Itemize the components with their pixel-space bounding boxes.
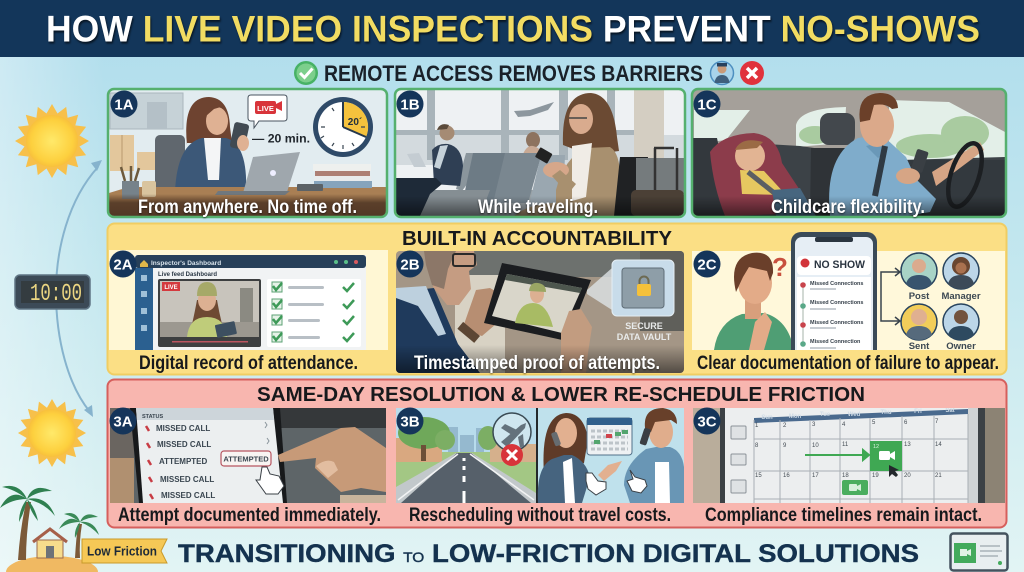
panel 3C <box>693 408 1005 526</box>
heading text: REMOTE ACCESS REMOVES BARRIERS <box>324 61 703 86</box>
icon: red cross <box>740 61 764 85</box>
title: HOW LIVE VIDEO INSPECTIONS PREVENT NO-SHOWS <box>46 8 980 50</box>
calendar: 13 <box>904 442 911 448</box>
header banner <box>0 0 1024 57</box>
sun-path timeline <box>15 104 102 467</box>
panel 2A <box>109 250 388 374</box>
woman on phone <box>538 413 622 503</box>
panel border <box>108 89 387 217</box>
panel 1A <box>108 89 387 218</box>
badge 1C: 1C <box>697 96 717 114</box>
calendar: 20 <box>904 473 911 479</box>
badge 2B <box>396 250 424 278</box>
caption: From anywhere. No time off. <box>138 197 357 218</box>
calendar: Wed <box>848 412 861 418</box>
badge 3C <box>694 408 720 434</box>
icon: inspector <box>710 62 734 84</box>
tablet list: ATTEMPTED <box>223 454 269 464</box>
badge 1A <box>110 90 138 118</box>
driver <box>829 93 984 216</box>
cursor hands <box>586 473 606 495</box>
icon: no flights <box>493 413 531 466</box>
panel 2C <box>692 232 1005 374</box>
palm left <box>0 486 55 560</box>
badge 3B: 3B <box>400 414 420 430</box>
road scene <box>396 408 538 503</box>
tablet list: ATTEMPTED <box>159 457 208 466</box>
avatars <box>901 253 979 340</box>
duration label: — 20 min. <box>252 132 310 146</box>
calendar: 11 <box>842 442 849 448</box>
avatar labels: Sent <box>909 341 930 352</box>
vault label: DATA VAULT <box>617 332 672 342</box>
steering wheel <box>946 141 984 209</box>
calendar: 10 <box>812 443 819 449</box>
checklist <box>267 279 361 347</box>
forearm and watch <box>464 288 494 336</box>
low friction banner: Low Friction <box>87 544 157 558</box>
plane <box>514 102 554 117</box>
calendar: 1 <box>755 423 759 429</box>
calendar: 2 <box>783 423 787 429</box>
stack of binders <box>297 164 372 191</box>
section heading: remote access <box>294 61 764 86</box>
calendar: 21 <box>935 473 942 479</box>
badge 3A: 3A <box>113 414 133 430</box>
avatar labels: Post <box>909 291 930 302</box>
panel 2B <box>396 250 684 374</box>
tablet list: MISSED CALL <box>161 491 215 500</box>
caption: Compliance timelines remain intact. <box>705 505 982 526</box>
badge 1C <box>694 90 720 118</box>
badge 1B: 1B <box>400 96 420 114</box>
vault label: SECURE <box>625 321 663 331</box>
icon: high sun <box>15 104 89 178</box>
low friction banner <box>82 539 167 563</box>
confused man <box>714 253 794 350</box>
calendar: Tue <box>820 412 831 418</box>
icon: green check <box>294 61 318 85</box>
badge 1A: 1A <box>114 96 134 114</box>
calendar: 18 <box>842 473 849 479</box>
caption: Attempt documented immediately. <box>118 505 381 526</box>
cursor <box>889 465 899 477</box>
calendar: 9 <box>783 443 787 449</box>
calendar: 15 <box>755 473 762 479</box>
live bubble: LIVE <box>257 104 274 113</box>
panel 1C <box>692 89 1006 218</box>
icon: device with video call <box>950 534 1008 570</box>
clock <box>313 97 373 157</box>
phone <box>791 232 877 362</box>
man with laptop <box>396 124 463 216</box>
green slot <box>870 441 902 471</box>
caption: While traveling. <box>478 197 598 218</box>
badge 2A: 2A <box>113 256 133 274</box>
calendar: 19 <box>872 473 879 479</box>
badge 3A <box>110 408 136 434</box>
calendar: Sat <box>945 408 955 414</box>
icon: low sun <box>18 399 86 467</box>
calendar: 7 <box>935 419 939 425</box>
hand <box>561 309 592 373</box>
live bubble <box>248 95 287 128</box>
calendar: Sun <box>761 415 773 421</box>
panel 3B <box>396 408 684 526</box>
tablet list: STATUS <box>142 414 164 420</box>
connector arrows <box>881 268 900 325</box>
heading: SAME-DAY RESOLUTION & LOWER RE-SCHEDULE FRICTION <box>257 383 865 406</box>
caption: Timestamped proof of attempts. <box>414 353 660 374</box>
house <box>33 529 67 558</box>
heading: BUILT-IN ACCOUNTABILITY <box>402 227 672 250</box>
call scene <box>536 408 684 503</box>
pointing hand <box>278 427 386 492</box>
video feed: LIVE <box>164 285 178 291</box>
tablet <box>484 263 591 341</box>
calendar: 6 <box>904 420 908 426</box>
phone: Missed Connections <box>810 281 863 287</box>
footer tagline: TRANSITIONING TO LOW-FRICTION DIGITAL SOLUTIONS <box>178 540 919 568</box>
panel 1B <box>395 89 685 218</box>
badge 3C: 3C <box>697 414 717 430</box>
badge 2C <box>694 250 720 278</box>
interior <box>733 144 1005 216</box>
green slot: 12 <box>873 444 879 450</box>
calendar: 17 <box>812 473 819 479</box>
tablet list: MISSED CALL <box>160 475 214 484</box>
arrow <box>805 450 869 460</box>
badge 2A <box>110 250 136 278</box>
calendar: 8 <box>755 443 759 449</box>
front seat <box>810 113 855 215</box>
avatar labels: Owner <box>946 341 976 352</box>
pencil cup and mug <box>121 166 156 199</box>
arc with arrows <box>56 160 102 417</box>
tablet list <box>130 408 287 503</box>
avatar labels: Manager <box>941 291 981 302</box>
panel border <box>692 89 1006 217</box>
calendar: Thu <box>880 410 892 416</box>
badge 3B <box>396 408 424 434</box>
badge 2B: 2B <box>400 256 420 274</box>
seats <box>420 153 565 216</box>
vault spotlight <box>587 268 612 310</box>
seated traveller in background <box>524 132 540 153</box>
video feed <box>158 279 261 347</box>
dark chair <box>614 157 648 216</box>
phone: Missed Connections <box>810 320 863 326</box>
windows <box>694 100 1005 162</box>
dashboard window <box>135 255 366 350</box>
luggage <box>631 148 684 216</box>
caption: Childcare flexibility. <box>771 197 925 218</box>
section: same-day resolution <box>108 380 1006 528</box>
calendar <box>720 408 985 503</box>
island <box>6 556 98 572</box>
tablet list: MISSED CALL <box>156 424 210 433</box>
clock: 20´ <box>348 117 362 128</box>
dashboard <box>908 160 1004 200</box>
calendar: 16 <box>783 473 790 479</box>
avatar labels <box>909 291 981 352</box>
vault label <box>617 322 672 340</box>
calendar: 14 <box>935 442 942 448</box>
digital clock: 10:00 <box>30 281 82 308</box>
calendar <box>587 418 632 455</box>
caption: Digital record of attendance. <box>139 353 358 374</box>
island with palms and house <box>0 486 99 572</box>
panel border <box>395 89 685 217</box>
woman at desk <box>155 97 250 192</box>
phone: NO SHOW <box>814 259 866 271</box>
small slot <box>842 480 868 495</box>
badge 2C: 2C <box>697 256 717 274</box>
phone: Missed Connections <box>810 300 863 306</box>
calendar: Mon <box>789 414 801 420</box>
cursor hand <box>256 467 284 494</box>
badge 1B <box>396 90 424 118</box>
calendar: Fri <box>914 409 922 415</box>
panel 3A <box>110 408 386 526</box>
question mark: ? <box>772 252 788 282</box>
child in car seat <box>710 133 816 216</box>
digital clock <box>15 275 90 309</box>
calendar: 4 <box>842 422 846 428</box>
desk <box>109 187 386 216</box>
woman with phone <box>514 93 620 216</box>
section: built-in accountability <box>108 224 1006 374</box>
calendar: 5 <box>872 420 876 426</box>
man <box>396 251 504 373</box>
calendar: 3 <box>812 422 816 428</box>
caption band <box>109 194 386 216</box>
vault icon <box>612 260 674 316</box>
phone: Missed Connection <box>810 339 861 345</box>
laptop <box>215 152 300 195</box>
palm right <box>59 513 99 558</box>
caption: Rescheduling without travel costs. <box>409 505 671 526</box>
dashboard window: Live feed Dashboard <box>158 272 217 278</box>
man on phone <box>624 408 684 503</box>
dashboard window: Inspector's Dashboard <box>151 260 221 267</box>
tablet list: MISSED CALL <box>157 440 211 449</box>
